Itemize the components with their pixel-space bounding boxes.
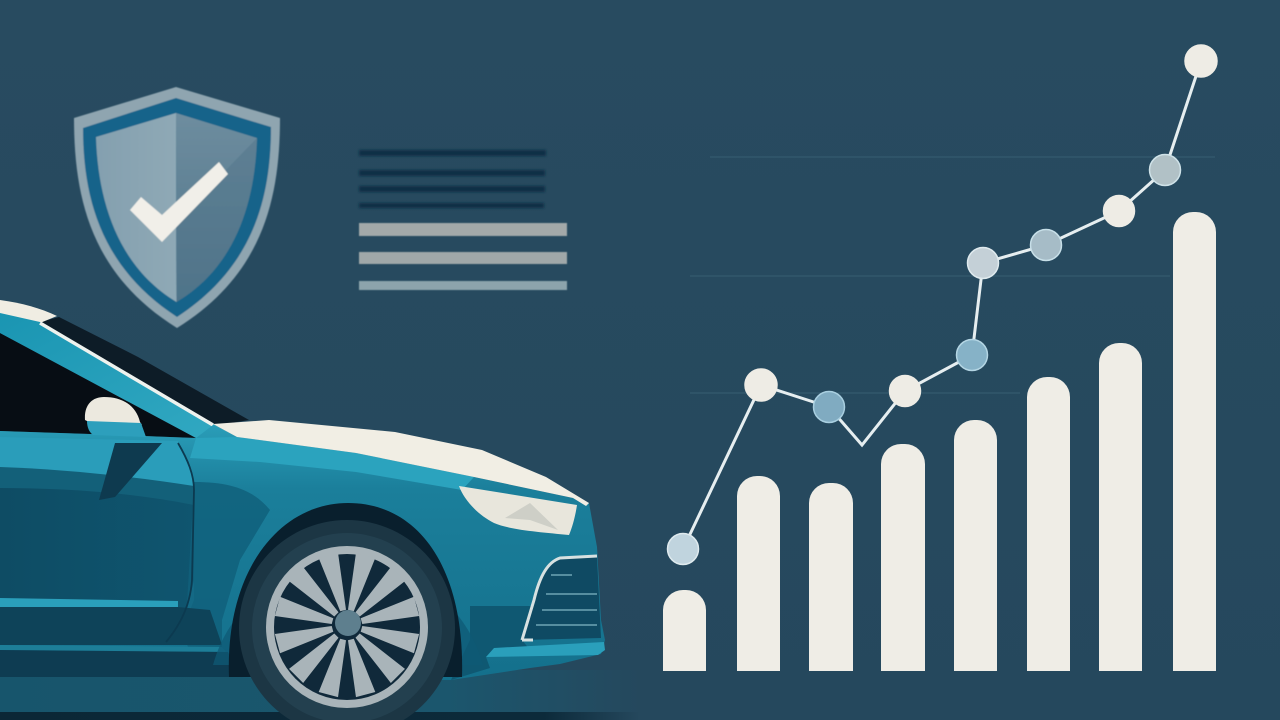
lower sill	[0, 598, 178, 607]
window	[0, 333, 196, 438]
car	[0, 300, 605, 720]
body	[0, 425, 605, 680]
headlight	[459, 486, 577, 535]
door seam	[166, 443, 194, 642]
bumper dark lower	[451, 606, 540, 680]
mirror shadow	[99, 443, 162, 500]
roof white	[0, 300, 57, 323]
grille	[522, 557, 601, 640]
A-pillar	[0, 313, 237, 438]
line chart with markers	[668, 45, 1217, 564]
bar chart	[663, 212, 1216, 671]
light band under hood	[190, 437, 474, 490]
spokes	[275, 553, 419, 697]
bumper lip	[486, 642, 605, 657]
list icon: dark and light text-like lines	[359, 150, 567, 290]
fender shade	[185, 482, 270, 660]
ground under car	[0, 670, 640, 720]
checkmark	[130, 162, 228, 242]
door panel	[0, 437, 194, 640]
icon: security shield with checkmark	[74, 87, 280, 328]
chart gridlines	[690, 157, 1215, 393]
windshield dark	[40, 317, 249, 426]
mirror	[85, 397, 142, 425]
wheel arch	[213, 562, 483, 665]
wheel	[239, 520, 455, 720]
hood white	[213, 420, 589, 506]
